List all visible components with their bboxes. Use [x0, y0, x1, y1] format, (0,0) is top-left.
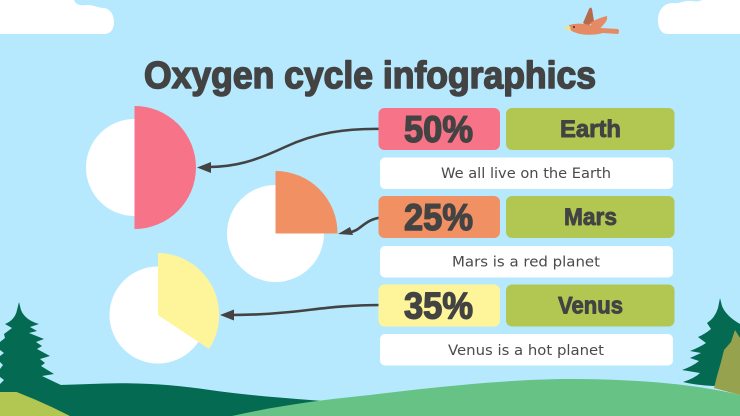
title: Oxygen cycle infographics	[144, 55, 596, 97]
panel: Venus row	[378, 284, 674, 366]
description: Earth: We all live on the Earth	[441, 166, 611, 182]
label: Venus	[506, 284, 674, 326]
description: Venus	[380, 334, 673, 366]
label: Earth: Earth	[560, 116, 621, 143]
label: Mars	[506, 196, 674, 238]
percent badge: 35%	[378, 284, 500, 326]
panel: Earth row	[378, 108, 674, 189]
chart: Mars pie 25%	[227, 171, 338, 282]
tree: olive right	[714, 330, 740, 395]
percent badge: 50%: 50%	[404, 109, 473, 150]
label: Mars: Mars	[564, 204, 617, 231]
hill: dark green	[0, 383, 345, 416]
description: Venus: Venus is a hot planet	[448, 343, 604, 359]
description: Mars: Mars is a red planet	[452, 254, 600, 270]
label: Venus: Venus	[558, 292, 623, 320]
arrow: Venus	[220, 305, 385, 320]
tree: left pine	[0, 302, 63, 392]
percent badge: 25%: 25%	[404, 197, 473, 238]
hill: light green	[232, 379, 740, 416]
percent badge: 25%	[378, 196, 500, 238]
percent badge: 35%: 35%	[404, 286, 473, 326]
description: Earth	[380, 158, 673, 189]
hill: olive left	[0, 386, 70, 416]
percent badge: 50%	[378, 108, 500, 150]
cloud: top right	[658, 0, 740, 34]
arrow: Mars	[338, 217, 385, 235]
arrow: Earth	[197, 129, 385, 173]
panel: Mars row	[378, 196, 674, 278]
icon: bird	[563, 8, 619, 35]
description: Mars	[380, 246, 673, 278]
chart: Earth pie 50%	[86, 106, 196, 229]
tree: right pine	[682, 298, 740, 386]
chart: Venus pie 35%	[110, 253, 219, 364]
label: Earth	[506, 108, 674, 150]
cloud: top left	[0, 0, 114, 34]
